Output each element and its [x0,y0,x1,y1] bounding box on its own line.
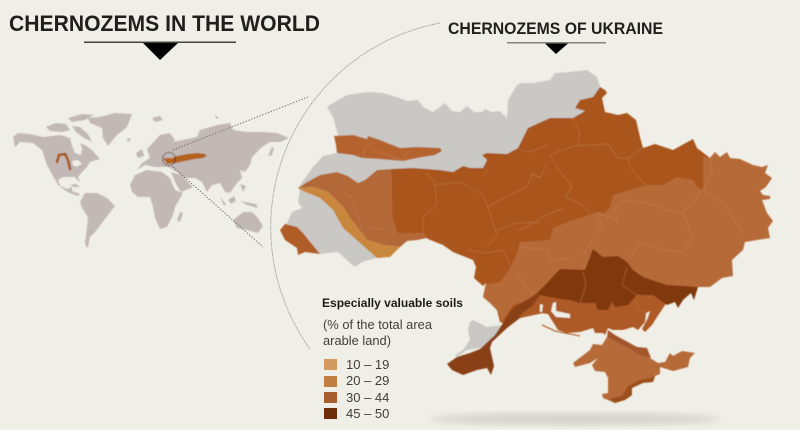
title: chernozems in the world [9,11,320,60]
10-19 percent strip [298,187,400,258]
legend item 45-50: 45 – 50 [346,406,389,421]
title: chernozems in the world: CHERNOZEMS IN THE WORLD [9,11,320,36]
lens arc [271,23,440,349]
chernozem belt: north america [57,154,70,169]
non-chernozem zone west [285,188,377,267]
crimea south coast [609,376,655,403]
non-chernozem zone north [298,70,600,188]
non-chernozem zone south [455,320,507,357]
western 20-29 percent zone [298,169,427,247]
45-50 percent zone: odessa coast [447,293,540,375]
legend item 10-19: 10 – 19 [346,357,389,372]
polissya soil stripe [334,135,442,161]
southern steppe zone [520,292,667,335]
map of ukraine [280,70,773,403]
kherson to crimea isthmus [607,330,651,358]
sea inlets [540,302,640,340]
title: chernozems of ukraine [448,19,663,54]
title: chernozems of ukraine: CHERNOZEMS OF UKRAINE [448,19,663,38]
south-west patch [280,224,320,255]
zoom lines [173,97,308,247]
chernozem belt: eurasia [163,153,207,164]
legend item 30-44 [324,390,389,405]
tendra spit [542,325,580,336]
legend item 10-19 [324,357,389,372]
locator circle [162,152,176,166]
ground shadow [430,412,720,426]
crimea [573,337,695,403]
world map [13,113,289,248]
main 30-44 percent zone [391,87,710,323]
legend note: (% of the total area [323,318,432,332]
region borders [342,118,743,313]
great lakes [72,160,82,167]
legend note: arable land) [323,334,391,348]
legend note [323,318,432,348]
legend heading: Especially valuable soils [322,296,463,310]
legend item 20-29 [324,373,389,388]
45-50 percent zone: central [537,249,698,310]
eastern and southern 20-29 percent zone [483,152,773,322]
legend item 20-29: 20 – 29 [346,373,389,388]
legend item 30-44: 30 – 44 [346,390,389,405]
legend [322,296,463,421]
legend item 45-50 [324,406,389,421]
